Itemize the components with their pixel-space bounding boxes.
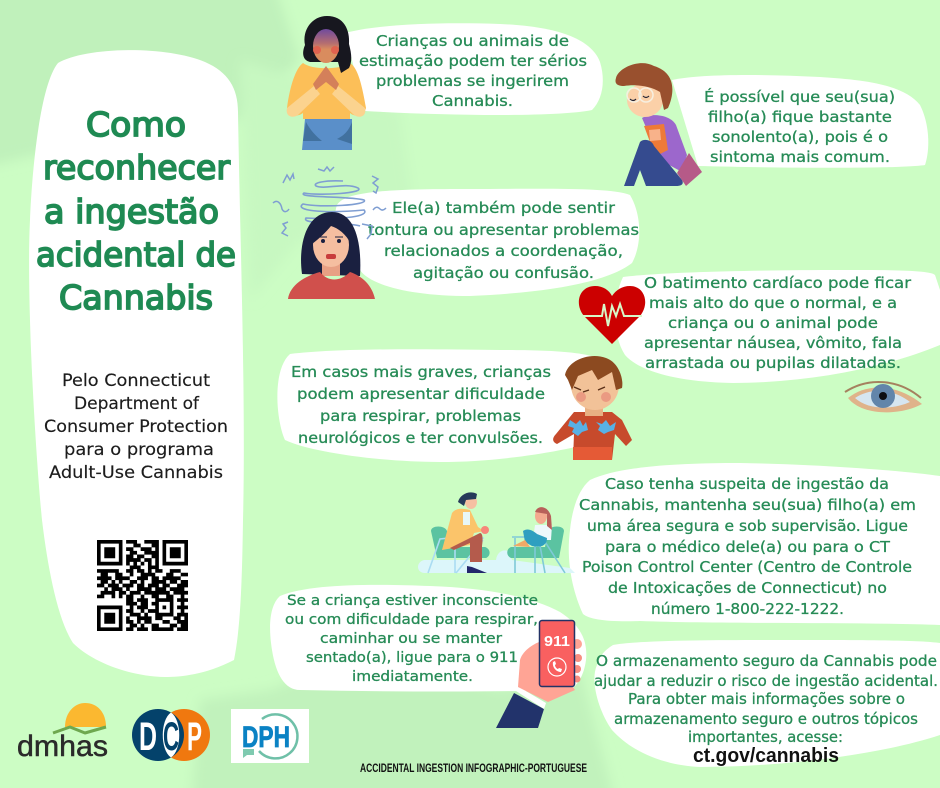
panel: title column xyxy=(29,50,244,677)
icon: hand holding phone 911 xyxy=(496,620,582,728)
panel: bubble children and pets xyxy=(345,23,603,115)
panel: bubble safe area xyxy=(569,463,940,625)
panel: bubble safe storage: importantes, acesse: xyxy=(688,728,843,746)
panel: bubble heartbeat: O batimento cardíaco pode ficar xyxy=(644,274,912,292)
panel: bubble dizziness xyxy=(335,189,639,296)
footer label: ACCIDENTAL INGESTION INFOGRAPHIC-PORTUGUESE xyxy=(360,761,587,775)
title: a ingestão xyxy=(44,192,219,231)
panel: bubble sleepy: É possível que seu(sua) xyxy=(704,87,895,106)
title: Como xyxy=(86,105,186,144)
panel: bubble children and pets: problemas se ingerirem xyxy=(376,72,569,90)
panel: bubble sleepy: sonolento(a), pois é o xyxy=(712,128,888,146)
panel: bubble sleepy: filho(a) fique bastante xyxy=(708,108,892,126)
panel: bubble safe storage: ct.gov/cannabis xyxy=(693,745,839,767)
icon: sleepy child xyxy=(615,63,702,186)
panel: bubble severe cases: para respirar, problemas xyxy=(320,407,521,425)
logo: DCP: C xyxy=(163,715,179,759)
panel: bubble safe storage: ajudar a reduzir o risco de ingestão acidental. xyxy=(594,672,938,690)
panel: bubble children and pets: Cannabis. xyxy=(432,92,513,110)
logo: DCP: P xyxy=(187,715,202,759)
panel: bubble severe cases: Em casos mais graves, crianças xyxy=(291,363,551,381)
title: Cannabis xyxy=(59,278,213,317)
panel: bubble sleepy xyxy=(672,75,928,168)
panel: bubble call 911: ou com dificuldade para respirar, xyxy=(285,612,538,628)
icon: consultation scene xyxy=(418,492,575,573)
title: acidental de xyxy=(36,235,236,274)
panel: bubble call 911: sentado(a), ligue para o 911 xyxy=(306,650,518,666)
panel: bubble safe storage: O armazenamento seguro da Cannabis pode xyxy=(596,652,937,670)
panel: bubble dizziness: tontura ou apresentar problemas xyxy=(368,221,639,239)
panel: bubble heartbeat xyxy=(615,270,940,383)
panel: bubble call 911: Se a criança estiver inconsciente xyxy=(287,593,538,609)
panel: bubble call 911: imediatamente. xyxy=(352,669,473,685)
panel: bubble safe area: número 1-800-222-1222. xyxy=(651,600,844,618)
panel: bubble safe area: Cannabis, mantenha seu(sua) filho(a) em xyxy=(579,496,916,514)
panel: bubble safe storage: Para obter mais informações sobre o xyxy=(628,690,905,708)
panel: bubble children and pets: Crianças ou animais de xyxy=(376,32,569,50)
panel: bubble severe cases: podem apresentar dificuldade xyxy=(297,385,545,403)
icon: eye xyxy=(845,382,922,412)
panel: bubble call 911: caminhar ou se manter xyxy=(320,631,502,647)
logo: DPH xyxy=(231,709,309,763)
panel: bubble sleepy: sintoma mais comum. xyxy=(710,148,890,166)
panel: bubble severe cases: neurológicos e ter convulsões. xyxy=(298,429,543,447)
panel: bubble safe area: uma área segura e sob supervisão. Ligue xyxy=(587,517,908,535)
panel: bubble safe storage: armazenamento seguro e outros tópicos xyxy=(614,710,918,728)
subtitle text block xyxy=(44,371,228,482)
subtitle text block: Department of xyxy=(74,394,200,413)
panel: bubble call 911 xyxy=(270,585,586,692)
panel: bubble heartbeat: criança ou o animal pode xyxy=(668,314,878,332)
panel: bubble children and pets: estimação podem ter sérios xyxy=(359,52,587,70)
panel: bubble safe storage xyxy=(594,640,940,767)
icon: child with seizure xyxy=(553,356,632,460)
subtitle text block: para o programa xyxy=(64,440,214,459)
logo: dmhas xyxy=(17,703,108,763)
logo: dmhas: dmhas xyxy=(17,730,108,763)
panel: bubble severe cases xyxy=(277,349,605,462)
logo: DCP: D xyxy=(139,715,157,759)
icon: heart with pulse xyxy=(579,286,645,344)
panel: bubble dizziness: relacionados a coordenação, xyxy=(384,242,623,260)
icon: hand holding phone 911: 911 xyxy=(544,633,570,650)
panel: bubble heartbeat: apresentar náusea, vômito, fala xyxy=(644,334,902,352)
panel: bubble heartbeat: mais alto do que o normal, e a xyxy=(649,294,897,312)
subtitle text block: Adult-Use Cannabis xyxy=(49,463,223,482)
panel: bubble dizziness: Ele(a) também pode sentir xyxy=(392,199,616,217)
panel: bubble dizziness: agitação ou confusão. xyxy=(413,264,594,282)
panel: bubble safe area: de Intoxicações de Connecticut) no xyxy=(608,579,887,597)
icon: worried woman xyxy=(287,16,366,150)
icon: dizzy woman with spiral xyxy=(273,167,386,299)
logo: DPH: DPH xyxy=(242,721,290,754)
title xyxy=(36,105,236,317)
QR code xyxy=(97,542,188,629)
panel: bubble safe area: para o médico dele(a) ou para o CT xyxy=(605,538,891,556)
subtitle text block: Consumer Protection xyxy=(44,417,228,436)
logo: DCP xyxy=(132,709,210,761)
panel: bubble safe area: Caso tenha suspeita de ingestão da xyxy=(605,475,889,493)
panel: bubble safe area: Poison Control Center (Centro de Controle xyxy=(582,558,912,576)
subtitle text block: Pelo Connecticut xyxy=(62,371,211,390)
panel: bubble heartbeat: arrastada ou pupilas dilatadas. xyxy=(645,354,901,372)
title: reconhecer xyxy=(43,148,230,187)
